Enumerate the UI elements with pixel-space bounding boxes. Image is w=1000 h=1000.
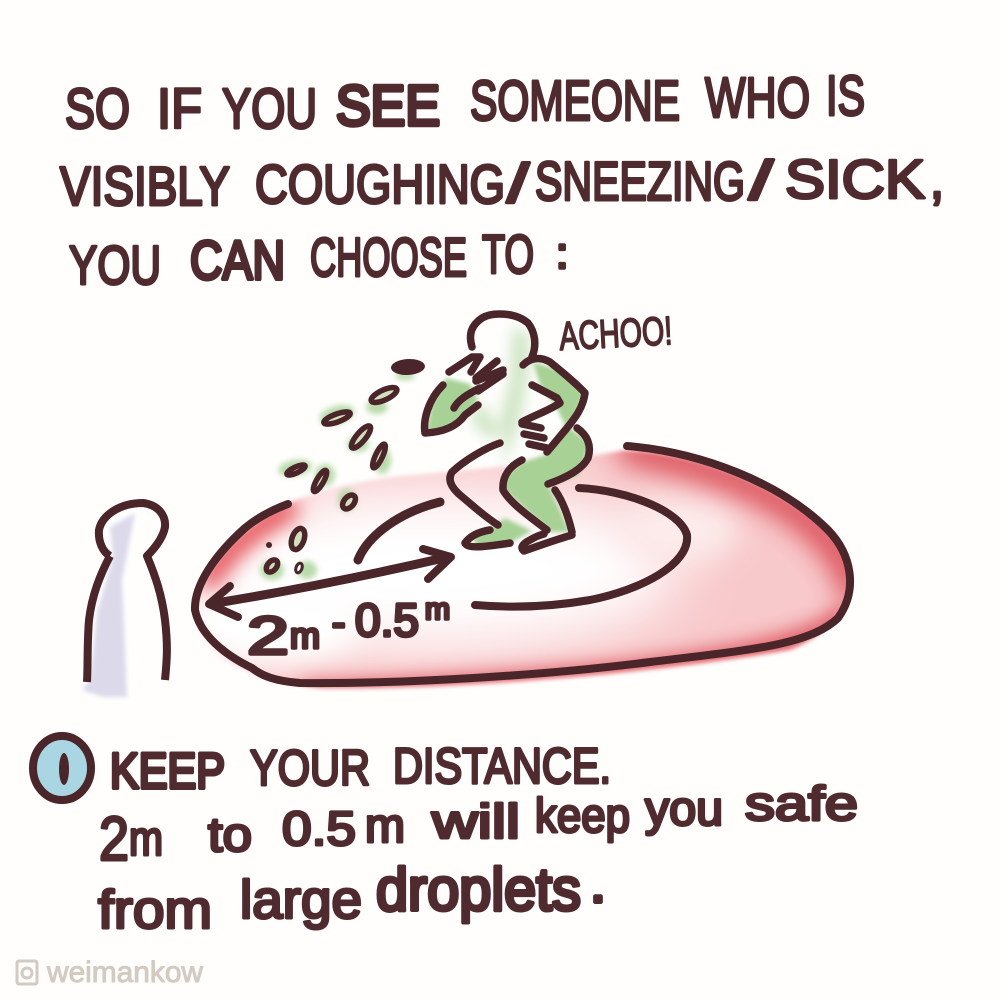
- title: YOU: [222, 77, 317, 141]
- step description: keep: [535, 790, 630, 843]
- title: SNEEZING: [535, 150, 745, 212]
- step heading: YOUR: [250, 740, 370, 796]
- title: IF: [157, 77, 202, 141]
- droplet zone: red spread area: [199, 448, 846, 692]
- title: SICK: [785, 148, 925, 210]
- distance label: m: [425, 593, 450, 626]
- step description: large: [240, 870, 362, 930]
- sneeze label: ACHOO!: [558, 309, 673, 359]
- title: CHOOSE: [310, 226, 467, 288]
- icon: sneezing person: [425, 314, 590, 551]
- title: VISIBLY: [60, 155, 230, 217]
- step description: .: [590, 854, 606, 914]
- step heading: KEEP: [110, 743, 225, 799]
- step description: to: [208, 809, 252, 862]
- droplets: [260, 358, 425, 580]
- title: /: [749, 149, 774, 211]
- step description: 2: [99, 805, 129, 874]
- title: YOU: [69, 234, 161, 296]
- step description: [98, 778, 858, 940]
- credit: weimankow: [46, 956, 203, 989]
- title: :: [556, 229, 568, 278]
- distance label: -: [332, 601, 345, 645]
- distance label: m: [290, 615, 320, 656]
- step description: safe: [745, 778, 858, 831]
- step description: will: [431, 796, 520, 849]
- title: CAN: [190, 229, 285, 291]
- step description: from: [98, 880, 212, 940]
- distance label: 2: [247, 606, 289, 666]
- title: SO: [65, 77, 130, 141]
- icon: bystander figure: [82, 503, 167, 697]
- step heading: DISTANCE.: [393, 738, 611, 794]
- title: /: [507, 152, 530, 214]
- title: SOMEONE: [470, 69, 680, 133]
- title: ,: [930, 148, 944, 210]
- title: WHO: [705, 66, 810, 130]
- icon: distance arrow: [209, 549, 451, 617]
- title: [60, 64, 944, 296]
- icon: number badge 1: [33, 736, 91, 800]
- title: COUGHING: [255, 153, 505, 215]
- distance diagram outline: [195, 446, 850, 683]
- title: IS: [826, 64, 865, 128]
- step description: m: [129, 813, 163, 866]
- step description: you: [645, 783, 723, 836]
- title: SEE: [336, 74, 440, 138]
- step description: m: [365, 800, 405, 853]
- distance label: 0.5: [355, 594, 419, 646]
- step description: droplets: [376, 856, 581, 923]
- step heading: [110, 738, 611, 799]
- title: TO: [482, 223, 534, 285]
- step description: 0.5: [282, 803, 356, 856]
